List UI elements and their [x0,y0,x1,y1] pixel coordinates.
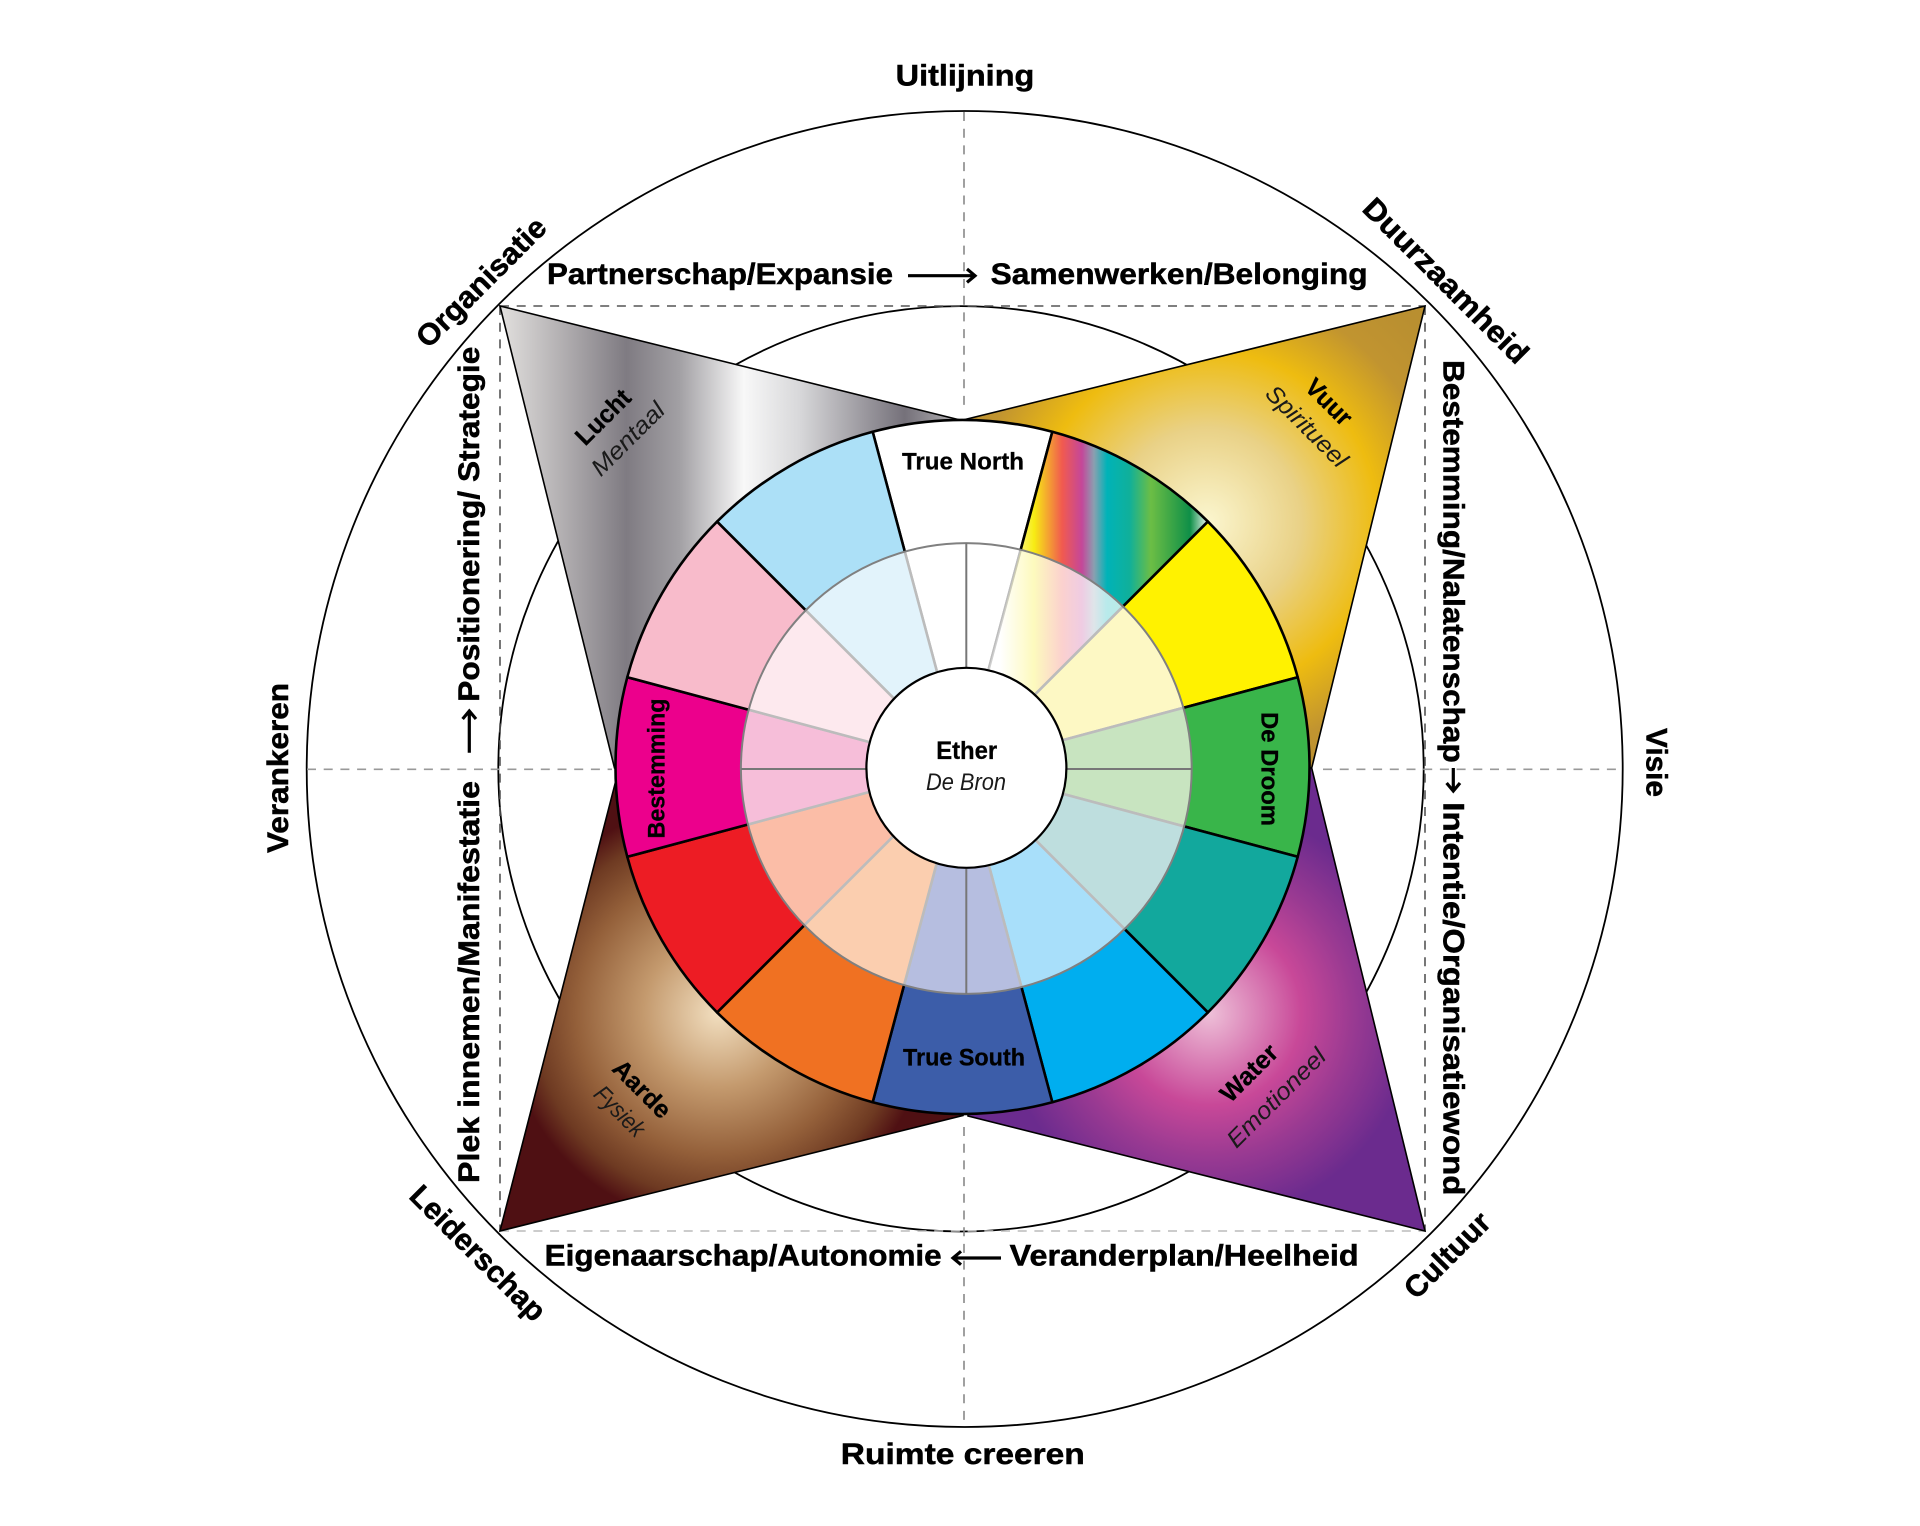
text: Eigenaarschap/Autonomie: Eigenaarschap/Autonomie [545,1240,942,1273]
panel: Vuur triangle [962,306,1425,768]
segment: rainbow [962,432,1208,767]
text: Bestemming/Nalatenschap: Bestemming/Nalatenschap [1436,360,1469,763]
text: Samenwerken/Belonging: Samenwerken/Belonging [991,258,1368,291]
label: Bestemming: Bestemming [644,698,671,838]
segment: True South [873,767,1052,1114]
infographic: compass wheel [266,64,1668,1464]
label: De Bron: De Bron [926,769,1006,796]
segment: red [627,767,962,1012]
middle circle [498,306,1424,1232]
segment: Bestemming magenta [615,677,962,857]
segment: True North [873,420,1052,767]
label: True South: True South [903,1045,1025,1072]
segment: yellow [962,522,1298,767]
label: True North: True North [902,448,1024,476]
segment: pink [627,522,962,767]
text: Positionering/ Strategie: Positionering/ Strategie [453,347,486,702]
label: Spiritueel: Spiritueel [1260,380,1353,474]
panel: Lucht triangle [500,306,962,768]
inner tinted ring [731,535,1194,999]
text: Partnerschap/Expansie: Partnerschap/Expansie [547,258,893,291]
panel: Water triangle [962,767,1425,1231]
heading: Organisatie: Organisatie [410,211,553,354]
label: Vuur: Vuur [1299,373,1358,432]
segment: teal [962,767,1298,1012]
label: Ether: Ether [936,737,997,765]
segment: orange [717,767,962,1102]
panel: Aarde triangle [500,767,963,1231]
segment: De Droom green [962,677,1310,857]
arrow: top [908,269,975,282]
heading: Uitlijning: Uitlijning [896,60,1034,93]
label: Water: Water [1215,1038,1284,1108]
label: Mentaal: Mentaal [586,396,671,482]
label: Lucht: Lucht [570,383,637,451]
heading: Leiderschap: Leiderschap [403,1179,552,1328]
segment: light blue [717,432,962,767]
text: Intentie/Organisatiewond: Intentie/Organisatiewond [1436,802,1469,1195]
heading: Duurzaamheid: Duurzaamheid [1356,192,1535,371]
label: Fysiek: Fysiek [588,1081,652,1144]
heading: Visie: Visie [1640,728,1673,797]
text: Plek innemen/Manifestatie: Plek innemen/Manifestatie [453,781,486,1183]
label: Emotioneel: Emotioneel [1222,1043,1332,1153]
heading: Cultuur: Cultuur [1398,1206,1498,1306]
heading: Verankeren: Verankeren [262,683,295,853]
arrow: right [1447,768,1460,791]
label: De Droom: De Droom [1256,712,1282,826]
colour wheel [615,420,1310,1114]
arrow: left [463,711,476,753]
text: Veranderplan/Heelheid: Veranderplan/Heelheid [1010,1240,1359,1273]
heading: Ruimte creeren: Ruimte creeren [841,1438,1085,1471]
outer circle [307,111,1623,1427]
label: Aarde: Aarde [607,1054,677,1124]
center circle [866,668,1066,868]
arrow: bottom [953,1251,1001,1265]
segment: blue [962,767,1208,1102]
